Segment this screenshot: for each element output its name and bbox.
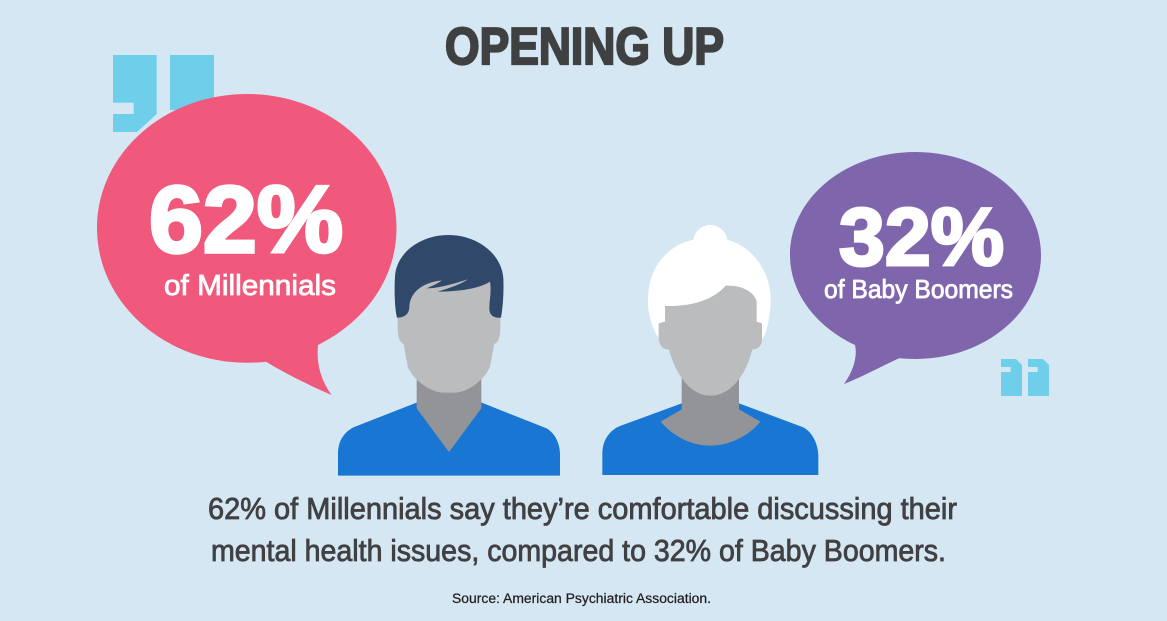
icon: millennial man avatar <box>338 235 560 476</box>
icon: baby boomer woman avatar <box>602 225 818 475</box>
body text: 62% of Millennials say they’re comfortable discussing their <box>208 492 957 526</box>
icon: closing quote marks <box>1001 359 1049 396</box>
stat: 32%: 32% <box>839 192 1004 283</box>
body text: mental health issues, compared to 32% of Baby Boomers. <box>211 534 946 568</box>
icon: opening quote marks <box>113 55 214 132</box>
label: of Baby Boomers: of Baby Boomers <box>824 274 1013 304</box>
body text <box>208 492 957 568</box>
panel: baby boomers speech bubble <box>790 152 1041 384</box>
stat: 62%: 62% <box>149 167 343 273</box>
source note: Source: American Psychiatric Association. <box>452 591 711 606</box>
title: OPENING UP <box>445 18 724 76</box>
panel: millennials speech bubble <box>97 94 396 395</box>
label: of Millennials: of Millennials <box>164 270 336 302</box>
